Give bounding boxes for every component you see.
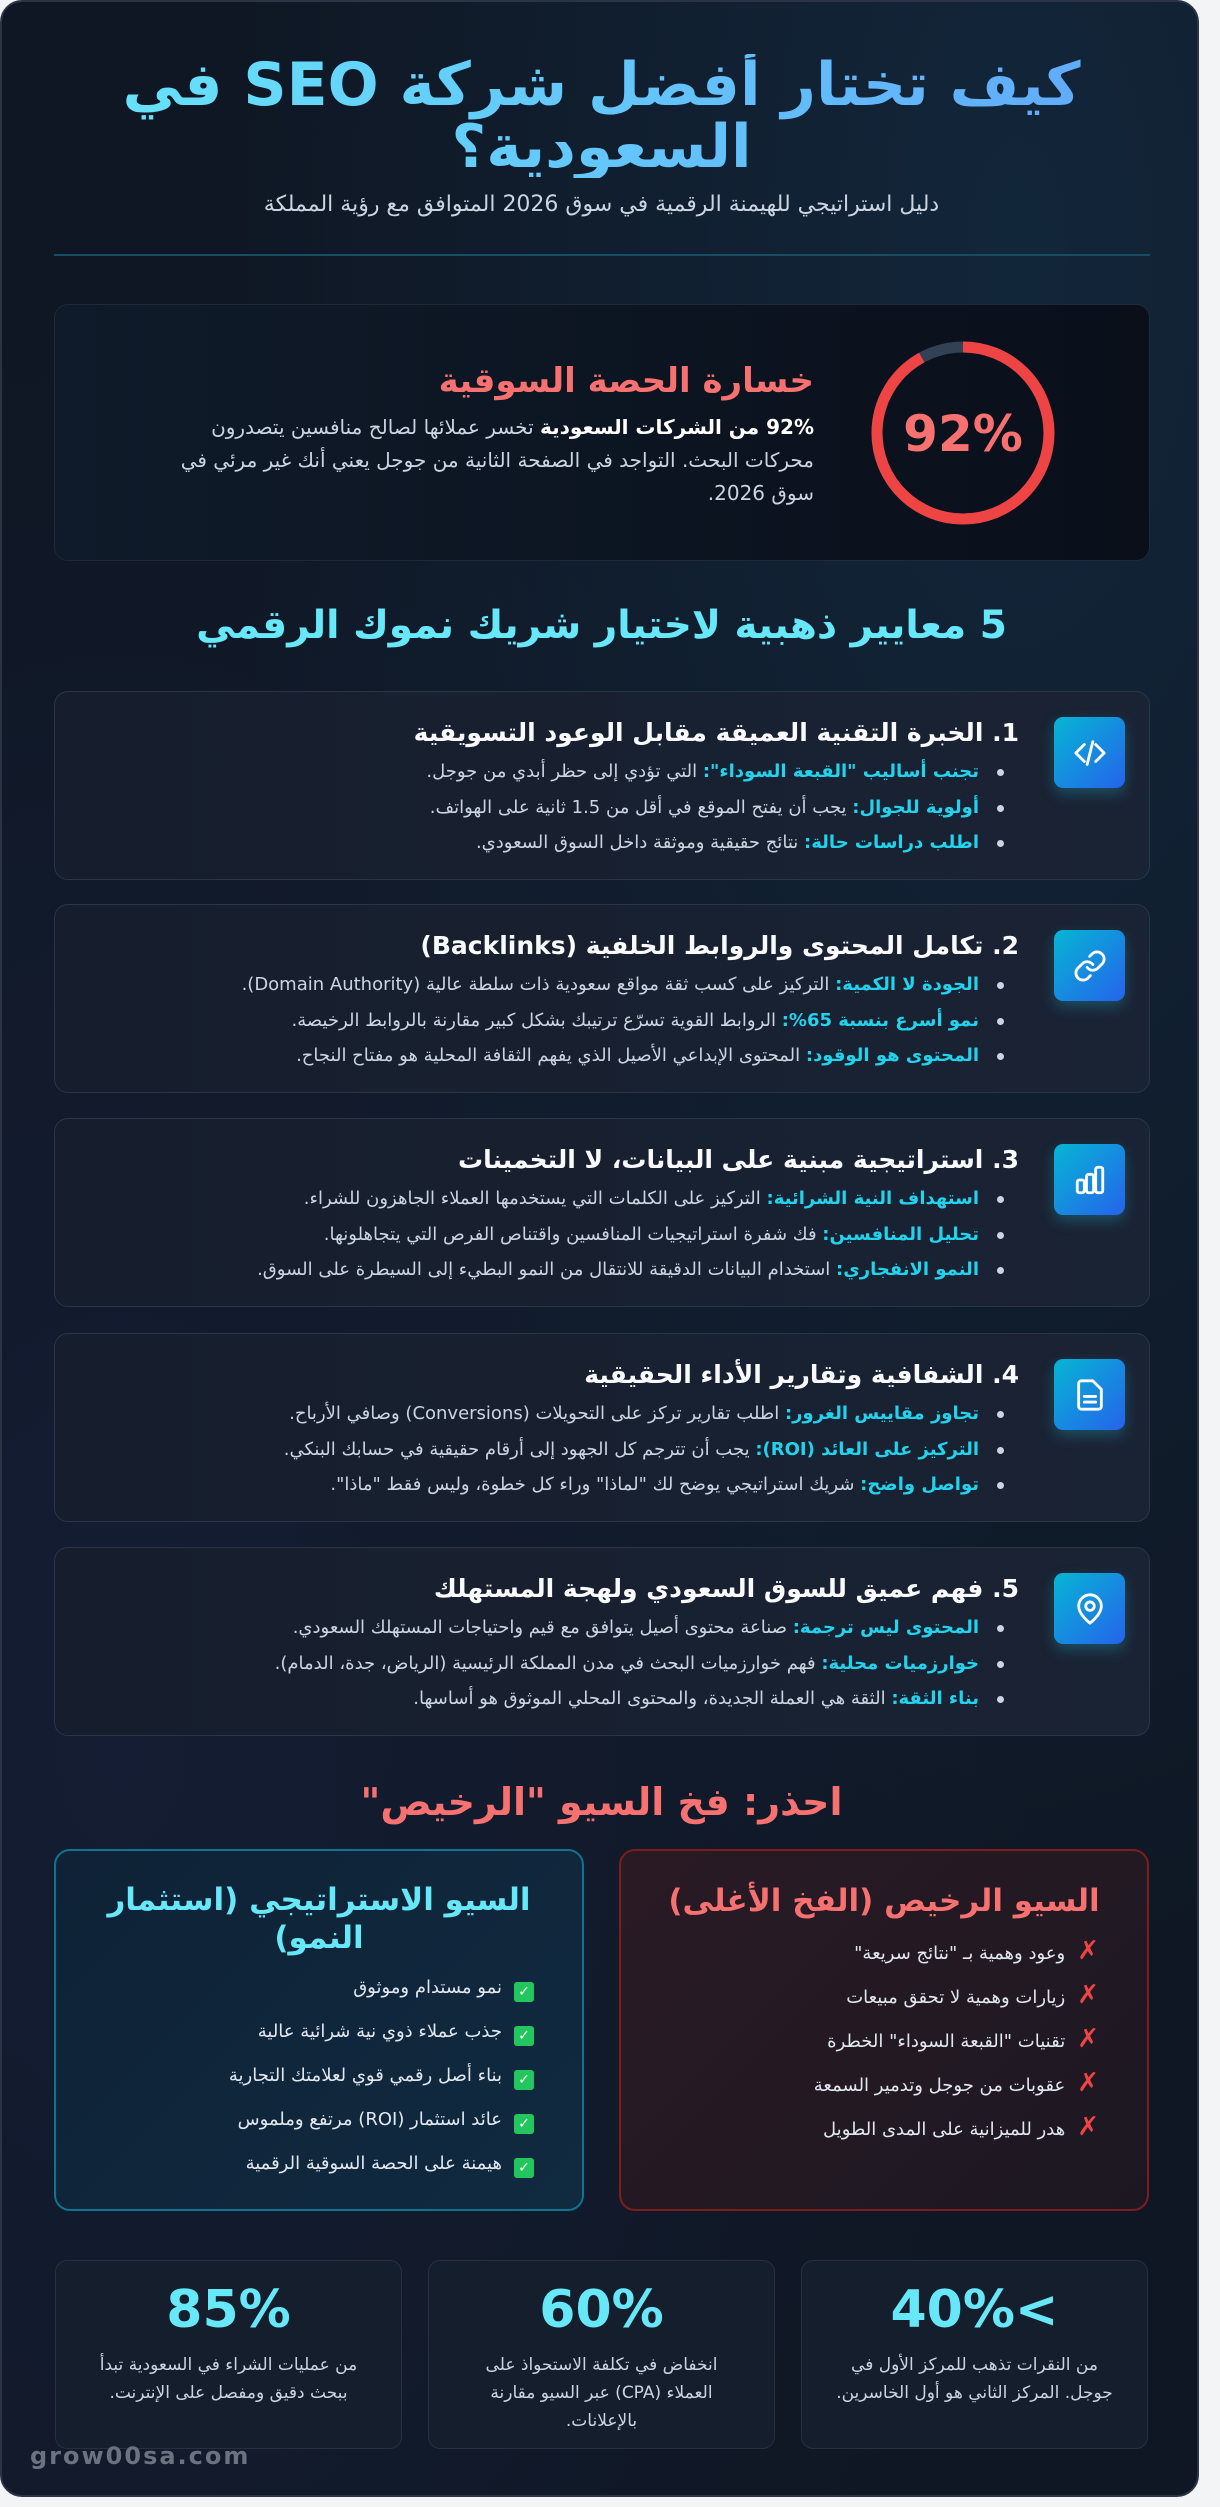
panel: criterion 1 [54, 691, 1150, 880]
panel: criterion 2: نمو أسرع بنسبة 65%: الروابط القوية تسرّع ترتيبك بشكل كبير مقارنة بالروابط الرخيصة. [292, 1010, 979, 1031]
criterion title: 2. تكامل المحتوى والروابط الخلفية (Backlinks) [420, 931, 1019, 960]
panel: criterion 2 [54, 904, 1150, 1093]
panel: criterion 4: تجاوز مقاييس الغرور: اطلب تقارير تركز على التحويلات (Conversions) وصافي الأرباح. [289, 1403, 979, 1424]
list [814, 1936, 1099, 2142]
stat: 40% [801, 2260, 1148, 2449]
donut chart 92% [872, 342, 1054, 524]
heading: السيو الاستراتيجي (استثمار النمو) [107, 1882, 531, 1956]
heading: خسارة الحصة السوقية [439, 361, 814, 401]
list: هيمنة على الحصة السوقية الرقمية [246, 2153, 502, 2174]
warning heading: احذر: فخ السيو "الرخيص" [361, 1780, 842, 1824]
criterion title: 3. استراتيجية مبنية على البيانات، لا التخمينات [458, 1145, 1019, 1174]
list: ✗هدر للميزانية على المدى الطويل [823, 2112, 1099, 2142]
title: السعودية؟ [451, 112, 752, 182]
body text: 92% من الشركات السعودية تخسر عملائها لصالح منافسين يتصدرون محركات البحث. التواجد في الصفحة الثانية من جوجل يعني أنك غير مرئي في سوق 2026. [181, 415, 814, 505]
panel: criterion 5: المحتوى ليس ترجمة: صناعة محتوى أصيل يتوافق مع قيم واحتياجات المستهلك السعودي. [293, 1617, 979, 1638]
stat: 85% [55, 2260, 402, 2449]
stat: 85%: 85% [166, 2280, 291, 2340]
list: ✓ [518, 2072, 530, 2088]
panel: criterion 3 [54, 1118, 1150, 1307]
heading: السيو الرخيص (الفخ الأغلى) [668, 1883, 1100, 1919]
list: بناء أصل رقمي قوي لعلامتك التجارية [229, 2065, 502, 2086]
title [2, 54, 1201, 178]
panel: criterion 1: اطلب دراسات حالة: نتائج حقيقية وموثقة داخل السوق السعودي. [476, 832, 979, 853]
criterion title: 1. الخبرة التقنية العميقة مقابل الوعود التسويقية [414, 718, 1019, 747]
icon: code [1054, 717, 1125, 788]
list: ✓ [518, 2116, 530, 2132]
criterion title: 5. فهم عميق للسوق السعودي ولهجة المستهلك [434, 1574, 1019, 1603]
list: ✗زيارات وهمية لا تحقق مبيعات [846, 1980, 1099, 2010]
icon: bar chart [1054, 1144, 1125, 1215]
stat: 40%: من النقرات تذهب للمركز الأول في جوجل. المركز الثاني هو أول الخاسرين. [836, 2355, 1113, 2403]
list: ✓ [518, 2160, 530, 2176]
panel: strategic SEO [54, 1849, 584, 2211]
panel: cheap SEO [619, 1849, 1149, 2211]
stat: 60%: 60% [539, 2280, 664, 2340]
panel: criterion 4: التركيز على العائد (ROI): يجب أن تترجم كل الجهود إلى أرقام حقيقية في حسابك البنكي. [284, 1439, 979, 1460]
panel: market share loss [54, 304, 1150, 561]
list: ✓ [518, 1984, 530, 2000]
donut chart 92%: 92% [903, 405, 1023, 463]
panel: criterion 5: خوارزميات محلية: فهم خوارزميات البحث في مدن المملكة الرئيسية (الرياض، جدة، الدمام). [275, 1653, 979, 1674]
list [229, 1977, 534, 2178]
panel: criterion 4: تواصل واضح: شريك استراتيجي يوضح لك "لماذا" وراء كل خطوة، وليس فقط "ماذا". [330, 1474, 979, 1495]
panel: criterion 5: بناء الثقة: الثقة هي العملة الجديدة، والمحتوى المحلي الموثوق هو أساسها. [413, 1688, 979, 1709]
stat: 40%: 40%< [890, 2280, 1059, 2340]
icon: link [1054, 930, 1125, 1001]
title: كيف تختار أفضل شركة SEO في [122, 50, 1080, 120]
panel: criterion 3: تحليل المنافسين: فك شفرة استراتيجيات المنافسين واقتناص الفرص التي يتجاهلونها. [324, 1224, 979, 1245]
panel: criterion 3: استهداف النية الشرائية: التركيز على الكلمات التي يستخدمها العملاء الجاهزون للشراء. [304, 1188, 979, 1209]
list: نمو مستدام وموثوق [353, 1977, 502, 1998]
list: ✓ [518, 2028, 530, 2044]
panel: criterion 2: الجودة لا الكمية: التركيز على كسب ثقة مواقع سعودية ذات سلطة عالية (Domain Authority). [242, 974, 979, 995]
subtitle: دليل استراتيجي للهيمنة الرقمية في سوق 2026 المتوافق مع رؤية المملكة [264, 192, 939, 217]
list: ✗وعود وهمية بـ "نتائج سريعة" [854, 1936, 1099, 1966]
section heading: 5 معايير ذهبية لاختيار شريك نموك الرقمي [196, 603, 1007, 648]
stat: 60% [428, 2260, 775, 2449]
criterion title: 4. الشفافية وتقارير الأداء الحقيقية [584, 1360, 1019, 1389]
list: ✗تقنيات "القبعة السوداء" الخطرة [827, 2024, 1099, 2054]
panel: criterion 4 [54, 1333, 1150, 1522]
panel: criterion 3: النمو الانفجاري: استخدام البيانات الدقيقة للانتقال من النمو البطيء إلى السيطرة على السوق. [257, 1259, 979, 1280]
stat: 60%: انخفاض في تكلفة الاستحواذ على العملاء (CPA) عبر السيو مقارنة بالإعلانات. [486, 2355, 717, 2431]
list: جذب عملاء ذوي نية شرائية عالية [258, 2021, 502, 2042]
icon: map pin [1054, 1573, 1125, 1644]
stat: 85%: من عمليات الشراء في السعودية تبدأ ببحث دقيق ومفصل على الإنترنت. [100, 2355, 357, 2403]
icon: document [1054, 1359, 1125, 1430]
panel: criterion 1: تجنب أساليب "القبعة السوداء": التي تؤدي إلى حظر أبدي من جوجل. [426, 761, 979, 782]
panel: criterion 1: أولوية للجوال: يجب أن يفتح الموقع في أقل من 1.5 ثانية على الهواتف. [430, 797, 979, 818]
watermark: grow00sa.com [30, 2442, 250, 2470]
list: ✗عقوبات من جوجل وتدمير السمعة [814, 2068, 1099, 2098]
list: عائد استثمار (ROI) مرتفع وملموس [238, 2109, 502, 2130]
panel: criterion 2: المحتوى هو الوقود: المحتوى الإبداعي الأصيل الذي يفهم الثقافة المحلية هو مفتاح النجاح. [296, 1045, 979, 1066]
panel: criterion 5 [54, 1547, 1150, 1736]
